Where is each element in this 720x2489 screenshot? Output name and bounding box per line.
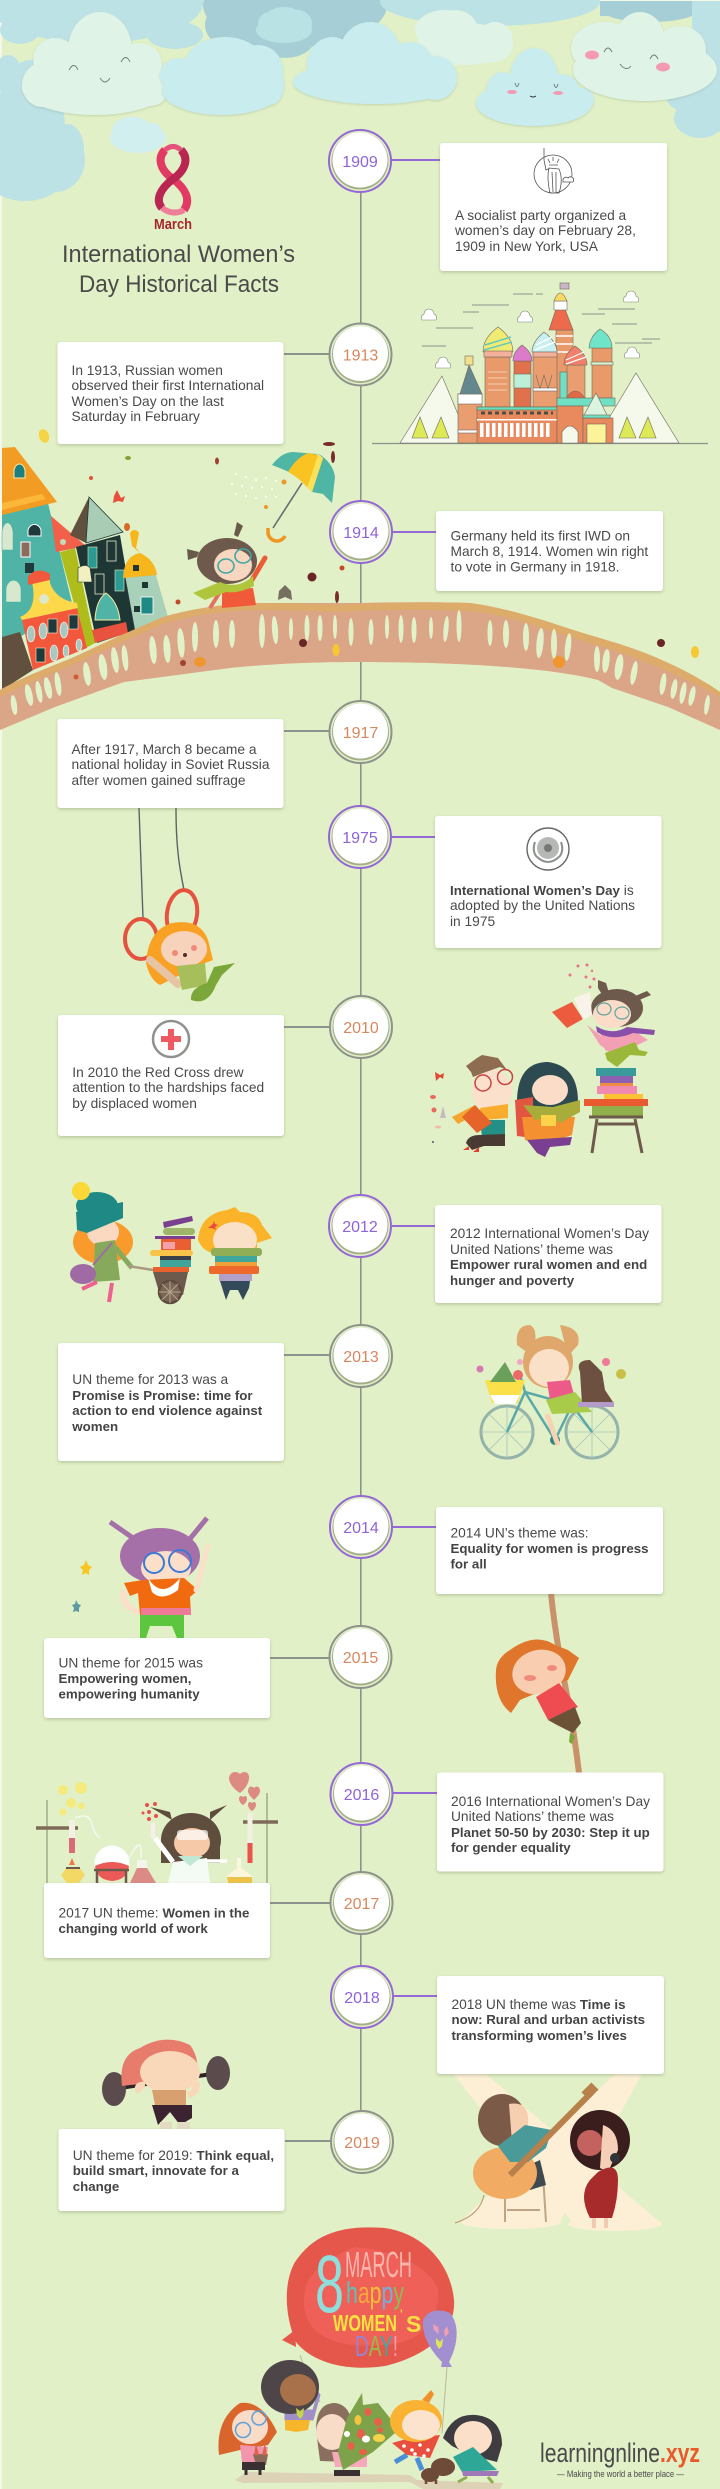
illustration: autumn bridge and houses [0, 428, 720, 730]
yellow hair kid [390, 2390, 442, 2470]
tagline: — Making the world a better place — [557, 2469, 684, 2480]
balloon lettering: happy [346, 2275, 404, 2310]
cart [128, 1266, 188, 1303]
card text: build smart, innovate for a [73, 2163, 240, 2178]
illustration: kids reading on books [430, 964, 655, 1157]
card text [452, 1997, 645, 2043]
purple dome tower [514, 361, 531, 407]
card text [58, 1656, 203, 1702]
card text [450, 1526, 649, 1572]
card text: Germany held its first IWD on [450, 528, 630, 544]
year marker 1917 [330, 701, 392, 763]
year marker 2016: 2016 [344, 1787, 379, 1804]
card text [73, 2148, 274, 2194]
year marker 2010 [330, 996, 392, 1058]
blue dome tower [533, 353, 557, 407]
card text: changing world of work [58, 1921, 208, 1936]
back clouds [203, 0, 700, 58]
illustration: St Basil's cathedral [372, 283, 708, 444]
year marker 1913 [330, 324, 392, 386]
balloon lettering: S [406, 2311, 421, 2337]
year marker 2015 [330, 1626, 392, 1688]
card text [454, 208, 636, 254]
year marker 2018 [331, 1966, 393, 2028]
small low cloud [110, 117, 166, 153]
balloon lettering: MARCH [345, 2244, 412, 2285]
balloon lettering [315, 2239, 421, 2363]
light clouds [0, 0, 720, 201]
illustration: girl on bicycle [476, 1325, 626, 1458]
March ribbon logo [154, 146, 192, 233]
year marker 2017: 2017 [344, 1896, 379, 1913]
card text: for all [450, 1556, 487, 1572]
card text: now: Rural and urban activists [452, 2012, 645, 2027]
balloon lettering: DAY! [355, 2331, 398, 2363]
card text: In 2010 the Red Cross drew [72, 1065, 244, 1080]
card text: 2016 International Women’s Day [451, 1794, 650, 1809]
card text: observed their first International [72, 378, 264, 393]
card text: in 1975 [450, 914, 495, 929]
card: 2015 [44, 1638, 270, 1718]
card: 1917 [58, 719, 284, 808]
card text: Empowering women, [58, 1671, 191, 1686]
card text: United Nations’ theme was [451, 1809, 614, 1824]
umbrella [268, 452, 335, 541]
card text: Empower rural women and end [450, 1257, 647, 1272]
card text [450, 528, 648, 574]
wall [477, 407, 557, 443]
red striped dome tower [567, 365, 585, 400]
card text [72, 742, 270, 788]
card text: March 8, 1914. Women win right [450, 544, 648, 559]
slate spire tower [458, 394, 482, 443]
logo [540, 2438, 700, 2480]
icon: United Nations emblem [527, 828, 569, 870]
card text: Equality for women is progress [450, 1541, 649, 1556]
card text: 2012 International Women’s Day [450, 1226, 649, 1241]
yellow dome tower [485, 357, 510, 407]
clouds [0, 0, 720, 201]
book stack [150, 1216, 195, 1272]
card text: In 1913, Russian women [72, 363, 223, 378]
card text: action to end violence against [72, 1403, 263, 1418]
balloon lettering: 8 [315, 2239, 344, 2330]
year marker 1975 [329, 806, 391, 868]
card text: After 1917, March 8 became a [72, 742, 257, 757]
card text: UN theme for 2015 was [58, 1656, 203, 1670]
card: 2014 [436, 1507, 663, 1594]
card text: A socialist party organized a [455, 208, 627, 223]
illustration: guitar and singer [453, 2074, 662, 2231]
card text: 2017 UN theme: Women in the [58, 1906, 249, 1920]
card text [72, 363, 264, 424]
year marker 1914 [330, 501, 392, 563]
year marker 1909 [329, 130, 391, 192]
stool [589, 1117, 643, 1153]
year marker 2016 [330, 1763, 392, 1825]
dog [421, 2458, 455, 2484]
card text: adopted by the United Nations [450, 898, 635, 913]
card text [450, 1226, 649, 1288]
jumping girl [552, 964, 655, 1067]
cloud centre left [160, 37, 284, 115]
illustration: science lab girl [36, 1772, 278, 1883]
year marker 1913: 1913 [343, 348, 378, 364]
illustration: girl climbing rope [496, 1594, 581, 1773]
title: International Women’s [62, 241, 295, 268]
balloon lettering: WOMEN [333, 2310, 397, 2336]
pale cloud face left [22, 12, 168, 115]
timeline vertical line [360, 190, 362, 2110]
girl with dark hair [515, 1062, 580, 1157]
illustration: kids with books cart [70, 1182, 272, 1303]
boy with glasses [452, 1055, 512, 1152]
card text: Promise is Promise: time for [72, 1388, 253, 1403]
card text [450, 883, 635, 929]
year marker 1909: 1909 [342, 154, 378, 171]
curly hair kid [261, 2355, 320, 2432]
card text [451, 1794, 650, 1855]
card: 2013 [58, 1343, 284, 1461]
year marker 1975: 1975 [342, 830, 378, 847]
year marker 2015: 2015 [343, 1650, 378, 1667]
card text: transforming women’s lives [452, 2028, 627, 2043]
card: 2012 [435, 1205, 662, 1303]
illustration: purple balloon [423, 2310, 457, 2433]
dark hair kid [443, 2415, 502, 2483]
card connectors [270, 160, 440, 2141]
year marker 2019: 2019 [344, 2135, 380, 2152]
card text: UN theme for 2019: Think equal, [73, 2148, 274, 2163]
card text: for gender equality [451, 1840, 571, 1855]
stack of books [584, 1068, 648, 1153]
card text: 1909 in New York, USA [455, 239, 599, 254]
card text [58, 1906, 249, 1936]
illustration: big balloon [282, 2227, 454, 2368]
card text: after women gained suffrage [72, 773, 246, 788]
year marker 2012 [329, 1195, 391, 1257]
March label: March [154, 216, 192, 233]
cloud faces [69, 48, 658, 97]
card text: to vote in Germany in 1918. [450, 560, 619, 574]
title [62, 241, 295, 298]
houses [2, 447, 168, 690]
small white clouds [421, 291, 640, 368]
card text: Saturday in February [72, 409, 200, 424]
year marker 2013: 2013 [343, 1349, 379, 1366]
falling leaves [37, 428, 699, 680]
card: 2019 [58, 2129, 284, 2211]
rain dots [231, 473, 277, 499]
main tower [556, 330, 573, 400]
year marker 2014: 2014 [343, 1520, 379, 1537]
title: Day Historical Facts [79, 271, 279, 298]
bouquet kid [316, 2393, 395, 2476]
bridge balusters [10, 610, 711, 715]
card: 2018 [437, 1976, 664, 2074]
card text: United Nations’ theme was [450, 1242, 613, 1257]
card text [71, 1372, 263, 1434]
card: 1909 [440, 143, 667, 271]
illustration: purple hair girl [72, 1518, 208, 1638]
teal dome tower [592, 348, 612, 398]
red hair kid [218, 2403, 277, 2475]
card text: empowering humanity [58, 1686, 200, 1702]
card text: hunger and poverty [450, 1273, 575, 1288]
card text: attention to the hardships faced [72, 1080, 264, 1095]
year marker 2013 [330, 1325, 392, 1387]
card text: women [71, 1419, 118, 1434]
card text: by displaced women [72, 1096, 197, 1111]
card text: national holiday in Soviet Russia [72, 757, 270, 772]
hearts [430, 1072, 446, 1143]
year marker 1917: 1917 [343, 725, 378, 742]
card text: 2018 UN theme was Time is [452, 1997, 626, 2012]
singer [570, 2110, 630, 2228]
bridge arch [0, 602, 720, 730]
small cloud face [476, 48, 594, 126]
ground [235, 2472, 503, 2489]
icon: statue of liberty [534, 148, 574, 193]
card: 2016 [437, 1772, 664, 1872]
guitarist [455, 2083, 598, 2223]
pale cloud upper right [415, 10, 513, 65]
card: 1913 [58, 342, 284, 444]
card text: International Women’s Day is [450, 883, 634, 898]
card: 1914 [436, 511, 663, 591]
card: 2010 [58, 1015, 284, 1136]
year marker 2010: 2010 [343, 1020, 379, 1037]
large pale cloud face right [571, 12, 717, 101]
balloon lettering: ' [400, 2306, 403, 2322]
year marker 2019 [331, 2111, 393, 2173]
card text: Planet 50-50 by 2030: Step it up [451, 1825, 650, 1840]
illustration: swing girl [125, 808, 235, 1001]
illustration: group of kids [218, 2355, 503, 2489]
motion lines [422, 294, 660, 346]
logo: learningnline.xyz [540, 2438, 700, 2468]
year marker 2017 [330, 1872, 392, 1934]
big cloud centre [293, 22, 457, 104]
year marker 1914: 1914 [343, 525, 379, 542]
card text: change [73, 2179, 119, 2194]
card: 1975 [435, 816, 662, 948]
boy with books [198, 1207, 272, 1300]
icon: red cross [153, 1021, 189, 1057]
year marker 2014 [330, 1496, 392, 1558]
illustration: weightlifter [102, 2040, 230, 2129]
card text: Women’s Day on the last [72, 394, 224, 409]
small top cloud [256, 7, 312, 43]
year marker 2018: 2018 [344, 1990, 380, 2007]
card text [72, 1065, 264, 1111]
card text: UN theme for 2013 was a [72, 1372, 229, 1387]
card text: women’s day on February 28, [454, 223, 636, 238]
girl with scarf [187, 522, 265, 608]
card text: 2014 UN’s theme was: [450, 1526, 589, 1540]
year marker 2012: 2012 [342, 1219, 378, 1236]
girl in hat [70, 1182, 133, 1302]
card: 2017 [44, 1883, 270, 1958]
